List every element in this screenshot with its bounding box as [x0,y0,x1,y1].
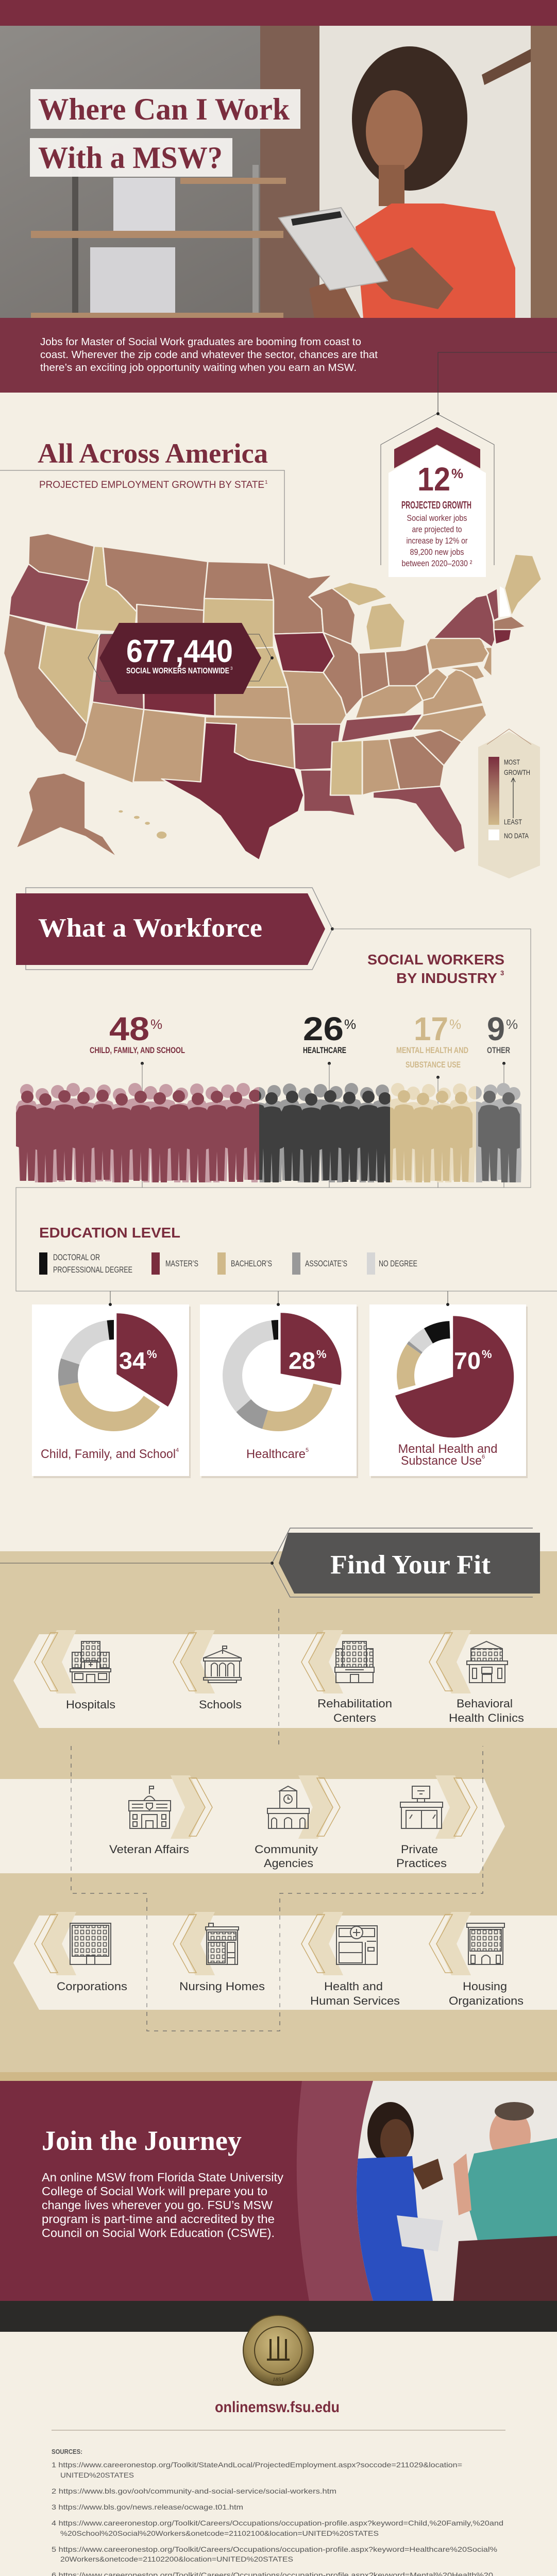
education legend: MASTER’S [165,1259,198,1268]
row 3 band [13,1916,557,2010]
sources: 3 https://www.bls.gov/news.release/ocwage.t01.htm [52,2503,243,2511]
header photo: woman with tablet [0,26,557,318]
callout: 12% projected growth: 12 [417,461,450,498]
heading: social workers by industry: SOCIAL WORKERS [367,952,504,968]
stat: 48% child family school: 48 [109,1010,149,1047]
item: Health and Human Services: Human Services [310,1994,400,2007]
item: Behavioral Health Clinics: Behavioral [457,1697,513,1710]
card: child family school donut: 4 [176,1447,179,1453]
sources: 4 https://www.careeronestop.org/Toolkit/Careers/Occupations/occupation-profile.aspx?keyword=Child,%20Family,%20and [52,2519,503,2527]
card: child family school donut: % [147,1348,157,1361]
card: healthcare donut: 28 [289,1347,315,1374]
item: Housing Organizations [429,1912,524,2007]
stat: 17% mental health: SUBSTANCE USE [406,1060,461,1070]
callout: 12% projected growth: are projected to [412,524,462,534]
item: Veteran Affairs [109,1775,212,1856]
education legend: BACHELOR’S [231,1259,272,1268]
banner: What a Workforce: What a Workforce [38,913,262,943]
item: Private Practices [396,1775,477,1870]
item: Private Practices: Private [401,1843,438,1856]
card: mental health donut: % [482,1348,492,1361]
map legend: GROWTH [504,768,530,776]
stat: 48% child family school: CHILD, FAMILY, AND SCHOOL [90,1045,185,1055]
logo: university seal [243,2315,313,2385]
callout: 677,440 social workers nationwide: SOCIAL WORKERS NATIONWIDE [126,667,229,675]
map legend [478,729,540,878]
item: Health and Human Services: Health and [324,1980,383,1993]
card: mental health donut [369,1303,528,1478]
item: Schools [173,1630,242,1711]
stat: 17% mental health: MENTAL HEALTH AND [396,1045,468,1055]
sources: 20Workers&onetcode=21102200&location=UNITED%20STATES [60,2555,293,2563]
map legend: MOST [504,758,520,766]
join the journey panel: Council on Social Work Education (CSWE). [42,2226,275,2240]
item: Private Practices: Practices [396,1857,447,1870]
intro text band [0,318,557,393]
stat: 48% child family school [90,1010,185,1065]
item: Community Agencies: Agencies [264,1857,313,1870]
sources: 2 https://www.bls.gov/ooh/community-and-social-service/social-workers.htm [52,2487,336,2495]
title box line 1: Where Can I Work [38,92,290,126]
join the journey panel: Join the Journey [42,2125,242,2156]
item: Health and Human Services [301,1912,400,2007]
sources: UNITED%20STATES [60,2471,134,2479]
stat: 17% mental health: % [449,1016,461,1032]
item: Corporations: Corporations [57,1980,127,1993]
card: mental health donut: Mental Health and [398,1442,498,1456]
stat: 48% child family school: % [150,1016,162,1032]
education legend: PROFESSIONAL DEGREE [53,1265,132,1275]
banner: What a Workforce [16,888,334,970]
item: Behavioral Health Clinics [429,1630,524,1724]
item: Veteran Affairs: Veteran Affairs [109,1843,189,1856]
education legend: NO DEGREE [379,1259,417,1268]
join the journey panel: change lives wherever you go. FSU’s MSW [42,2198,273,2212]
stat: 17% mental health: 17 [414,1010,448,1047]
card: healthcare donut [200,1303,358,1478]
card: child family school donut: 34 [119,1347,146,1374]
item: Rehabilitation Centers: Centers [333,1711,376,1724]
card: child family school donut [32,1303,191,1478]
education legend: ASSOCIATE’S [305,1259,347,1268]
card: mental health donut: Substance Use [401,1454,482,1468]
intro text band: Jobs for Master of Social Work graduates are booming from coast to [40,336,361,348]
item: Housing Organizations: Organizations [449,1994,524,2007]
footer url: onlinemsw.fsu.edu [215,2399,340,2416]
item: Behavioral Health Clinics: Health Clinics [449,1711,524,1724]
join the journey panel: program is part-time and accredited by the [42,2212,275,2226]
item: Hospitals: Hospitals [66,1698,115,1711]
callout: 12% projected growth: Social worker jobs [407,513,467,523]
intro text band: there’s an exciting job opportunity waiting when you earn an MSW. [40,362,357,374]
card: healthcare donut: % [316,1348,327,1361]
heading: All Across America: All Across America [38,438,268,469]
join the journey panel: An online MSW from Florida State University [42,2171,284,2184]
card: child family school donut: Child, Family, and School [41,1447,176,1461]
item: Housing Organizations: Housing [463,1980,507,1993]
crowd silhouettes chart [15,1083,525,1185]
heading: social workers by industry: BY INDUSTRY [396,970,497,986]
sources: 1 https://www.careeronestop.org/Toolkit/StateAndLocal/ProjectedEmployment.aspx?soccode=211029&location= [52,2461,462,2469]
logo: university seal: 1851 [273,2377,284,2383]
heading: education level: EDUCATION LEVEL [39,1225,180,1241]
map legend: NO DATA [504,832,529,840]
stat: 26% healthcare: 26 [303,1010,344,1047]
header: top band [0,0,557,26]
item: Community Agencies: Community [255,1843,318,1856]
callout: 677,440 social workers nationwide: 3 [230,666,233,671]
card: healthcare donut: 5 [306,1447,309,1453]
intro text band: coast. Wherever the zip code and whatever the sector, chances are that [40,349,378,361]
card: healthcare donut: Healthcare [246,1447,306,1461]
card: mental health donut: 6 [482,1454,485,1460]
callout: 12% projected growth: % [451,466,463,481]
heading: social workers by industry [367,952,504,986]
stat: 26% healthcare: HEALTHCARE [303,1045,346,1055]
item: Hospitals [35,1630,115,1711]
stat: 9% other: OTHER [487,1045,510,1055]
heading: All Across America: 1 [265,480,268,485]
stat: 26% healthcare: % [344,1016,356,1032]
stat: 17% mental health [396,1010,468,1079]
sources [52,2448,503,2576]
dashed connectors [71,1609,483,2031]
item: Nursing Homes: Nursing Homes [179,1980,265,1993]
heading: All Across America: PROJECTED EMPLOYMENT GROWTH BY STATE [39,480,264,490]
dark band [0,2301,557,2332]
education legend: DOCTORAL OR [53,1252,100,1262]
photo: two people talking [335,2081,557,2301]
stat: 9% other [487,1010,518,1065]
join the journey panel [0,2081,557,2301]
item: Schools: Schools [199,1698,242,1711]
sources: SOURCES: [52,2448,82,2455]
callout: 12% projected growth [381,412,494,577]
item: Rehabilitation Centers [301,1630,392,1724]
map: projected growth by state [4,533,542,860]
item: Nursing Homes [173,1912,265,1993]
item: Rehabilitation Centers: Rehabilitation [317,1697,392,1710]
banner: Find Your Fit [271,1528,540,1597]
row 2 band [0,1779,505,1873]
callout: 677,440 social workers nationwide: 677,440 [126,634,233,669]
sources: %20School%20Social%20Workers&onetcode=21102100&location=UNITED%20STATES [60,2529,379,2537]
callout: 12% projected growth: between 2020–2030 ² [402,558,472,568]
heading: social workers by industry: 3 [500,969,504,977]
stat: 9% other: % [506,1016,518,1032]
callout: 12% projected growth: PROJECTED GROWTH [401,500,471,511]
join the journey panel: College of Social Work will prepare you to [42,2184,267,2198]
heading: All Across America [38,438,268,490]
callout: 12% projected growth: increase by 12% or [406,536,468,546]
sources: 5 https://www.careeronestop.org/Toolkit/Careers/Occupations/occupation-profile.aspx?keyword=Healthcare%20Social% [52,2545,497,2553]
stat: 26% healthcare [303,1010,356,1065]
card: mental health donut: 70 [454,1347,481,1374]
banner: Find Your Fit: Find Your Fit [330,1550,491,1580]
row 1 band [13,1634,557,1728]
find your fit background [0,1551,557,2072]
education legend [39,1252,417,1275]
item: Corporations [35,1912,127,1993]
item: Community Agencies [255,1775,340,1870]
callout: 12% projected growth: 89,200 new jobs [410,547,464,557]
map legend: LEAST [504,818,522,826]
title box line 2: With a MSW? [38,141,223,175]
stat: 9% other: 9 [487,1010,505,1047]
callout: 677,440 social workers nationwide [88,623,274,694]
